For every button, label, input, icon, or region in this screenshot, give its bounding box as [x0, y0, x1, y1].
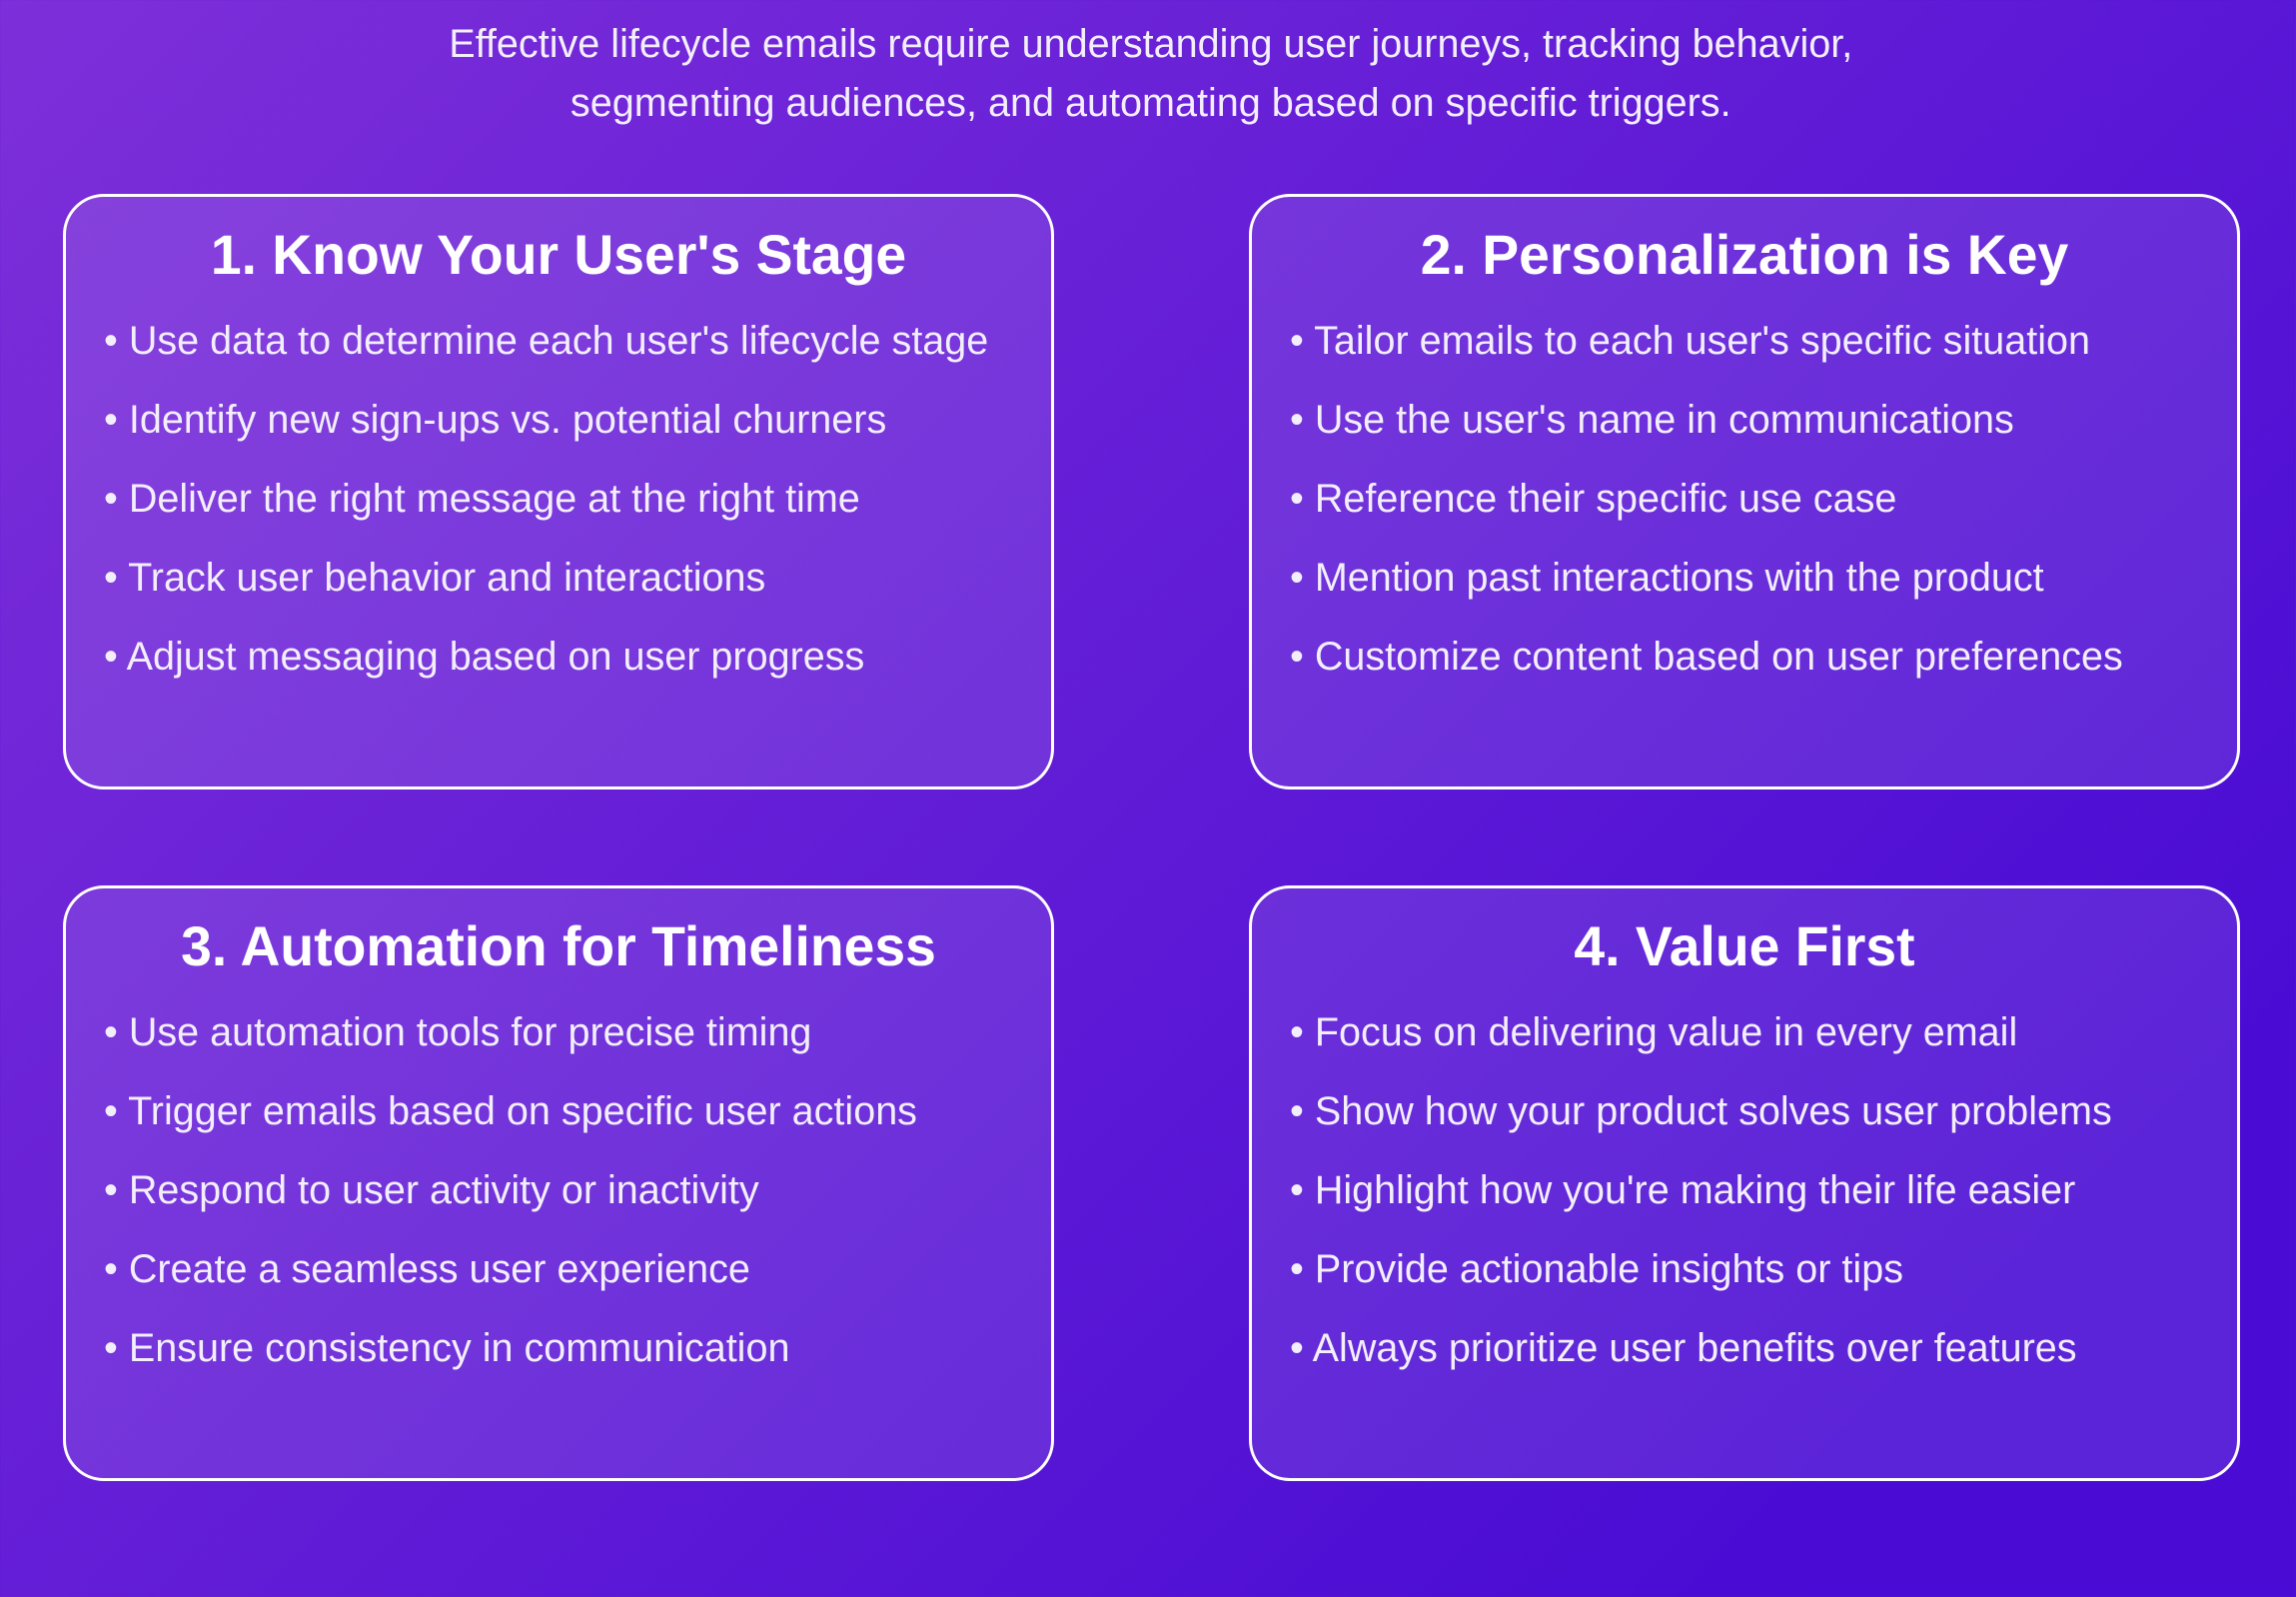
- list: card 4: [1290, 1010, 2112, 1370]
- list: card 4: • Show how your product solves user problems: [1290, 1089, 2112, 1133]
- list: card 2: [1290, 318, 2123, 679]
- intro text: Effective lifecycle emails require understanding user journeys, tracking behavior,: [449, 22, 1852, 66]
- list: card 3: • Use automation tools for precise timing: [104, 1010, 811, 1054]
- panel: know your user's stage: [63, 194, 1054, 790]
- list: card 4: • Provide actionable insights or tips: [1290, 1247, 1903, 1291]
- panel: automation for timeliness: [63, 885, 1054, 1481]
- list: card 2: • Use the user's name in communications: [1290, 398, 2014, 442]
- list: card 3: [104, 1010, 917, 1370]
- list: card 4: • Focus on delivering value in every email: [1290, 1010, 2017, 1054]
- list: card 2: • Customize content based on user preferences: [1290, 635, 2123, 679]
- list: card 1: • Identify new sign-ups vs. potential churners: [104, 398, 886, 442]
- panel: value first: [1249, 885, 2240, 1481]
- heading: card 4: 4. Value First: [1574, 915, 1915, 977]
- list: card 1: • Use data to determine each user's lifecycle stage: [104, 318, 988, 362]
- list: card 3: • Respond to user activity or inactivity: [104, 1168, 759, 1212]
- list: card 4: • Highlight how you're making their life easier: [1290, 1168, 2075, 1212]
- heading: card 3: 3. Automation for Timeliness: [181, 915, 936, 977]
- list: card 1: [104, 318, 988, 679]
- list: card 4: • Always prioritize user benefits over features: [1290, 1326, 2077, 1370]
- list: card 3: • Ensure consistency in communication: [104, 1326, 789, 1370]
- intro text: [449, 22, 1852, 125]
- list: card 2: • Mention past interactions with the product: [1290, 556, 2044, 600]
- list: card 1: • Deliver the right message at the right time: [104, 477, 860, 521]
- panel: personalization is key: [1249, 194, 2240, 790]
- list: card 2: • Reference their specific use case: [1290, 477, 1896, 521]
- list: card 2: • Tailor emails to each user's specific situation: [1290, 318, 2090, 362]
- list: card 3: • Create a seamless user experience: [104, 1247, 750, 1291]
- heading: card 1: 1. Know Your User's Stage: [211, 224, 906, 286]
- heading: card 2: 2. Personalization is Key: [1421, 224, 2068, 286]
- list: card 1: • Track user behavior and interactions: [104, 556, 765, 600]
- list: card 1: • Adjust messaging based on user progress: [104, 635, 864, 679]
- intro text: segmenting audiences, and automating based on specific triggers.: [571, 81, 1731, 125]
- list: card 3: • Trigger emails based on specific user actions: [104, 1089, 917, 1133]
